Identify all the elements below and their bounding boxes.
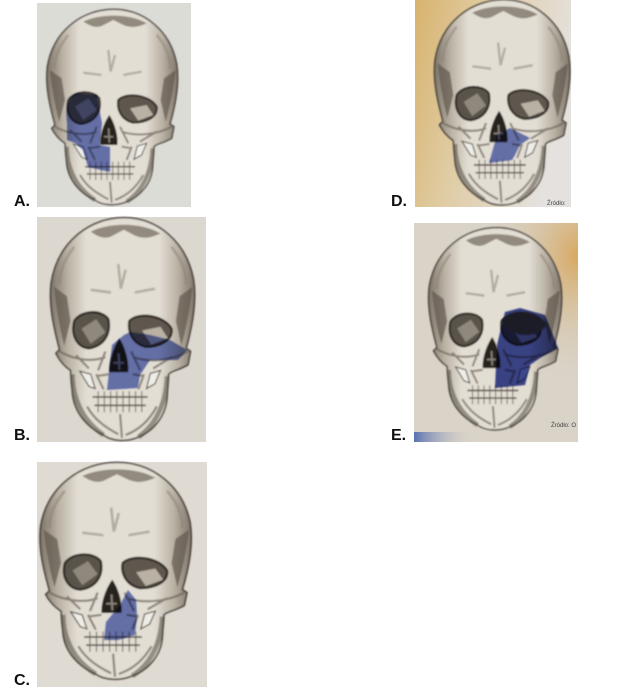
panel B: skull with blue right zygoma and maxilla (37, 217, 206, 442)
source note D: Źródło: (547, 200, 566, 207)
blue highlight D (489, 128, 530, 163)
blue highlight C (104, 590, 137, 640)
label B: B. (14, 427, 30, 444)
skull illustration A (47, 9, 178, 205)
label D: D. (391, 193, 407, 210)
blue highlight A (66, 93, 110, 172)
label E: E. (391, 427, 406, 444)
blue highlight E (495, 308, 558, 388)
skull illustration C (40, 462, 191, 679)
panel E: skull with blue right orbit and maxilla (414, 223, 578, 442)
skull illustration D (434, 0, 570, 205)
panel C: skull with blue right maxilla (37, 462, 207, 687)
label A: A. (14, 193, 30, 210)
skull illustration B (50, 218, 195, 440)
panel D: skull with blue lower maxilla (415, 0, 571, 207)
source note E: Źródło: O (551, 422, 576, 429)
dark orbit E (501, 312, 547, 335)
blue highlight B (107, 332, 187, 390)
panel A: skull with blue left orbit and maxilla (37, 3, 191, 207)
label C: C. (14, 672, 30, 689)
skull illustration E (429, 228, 562, 430)
